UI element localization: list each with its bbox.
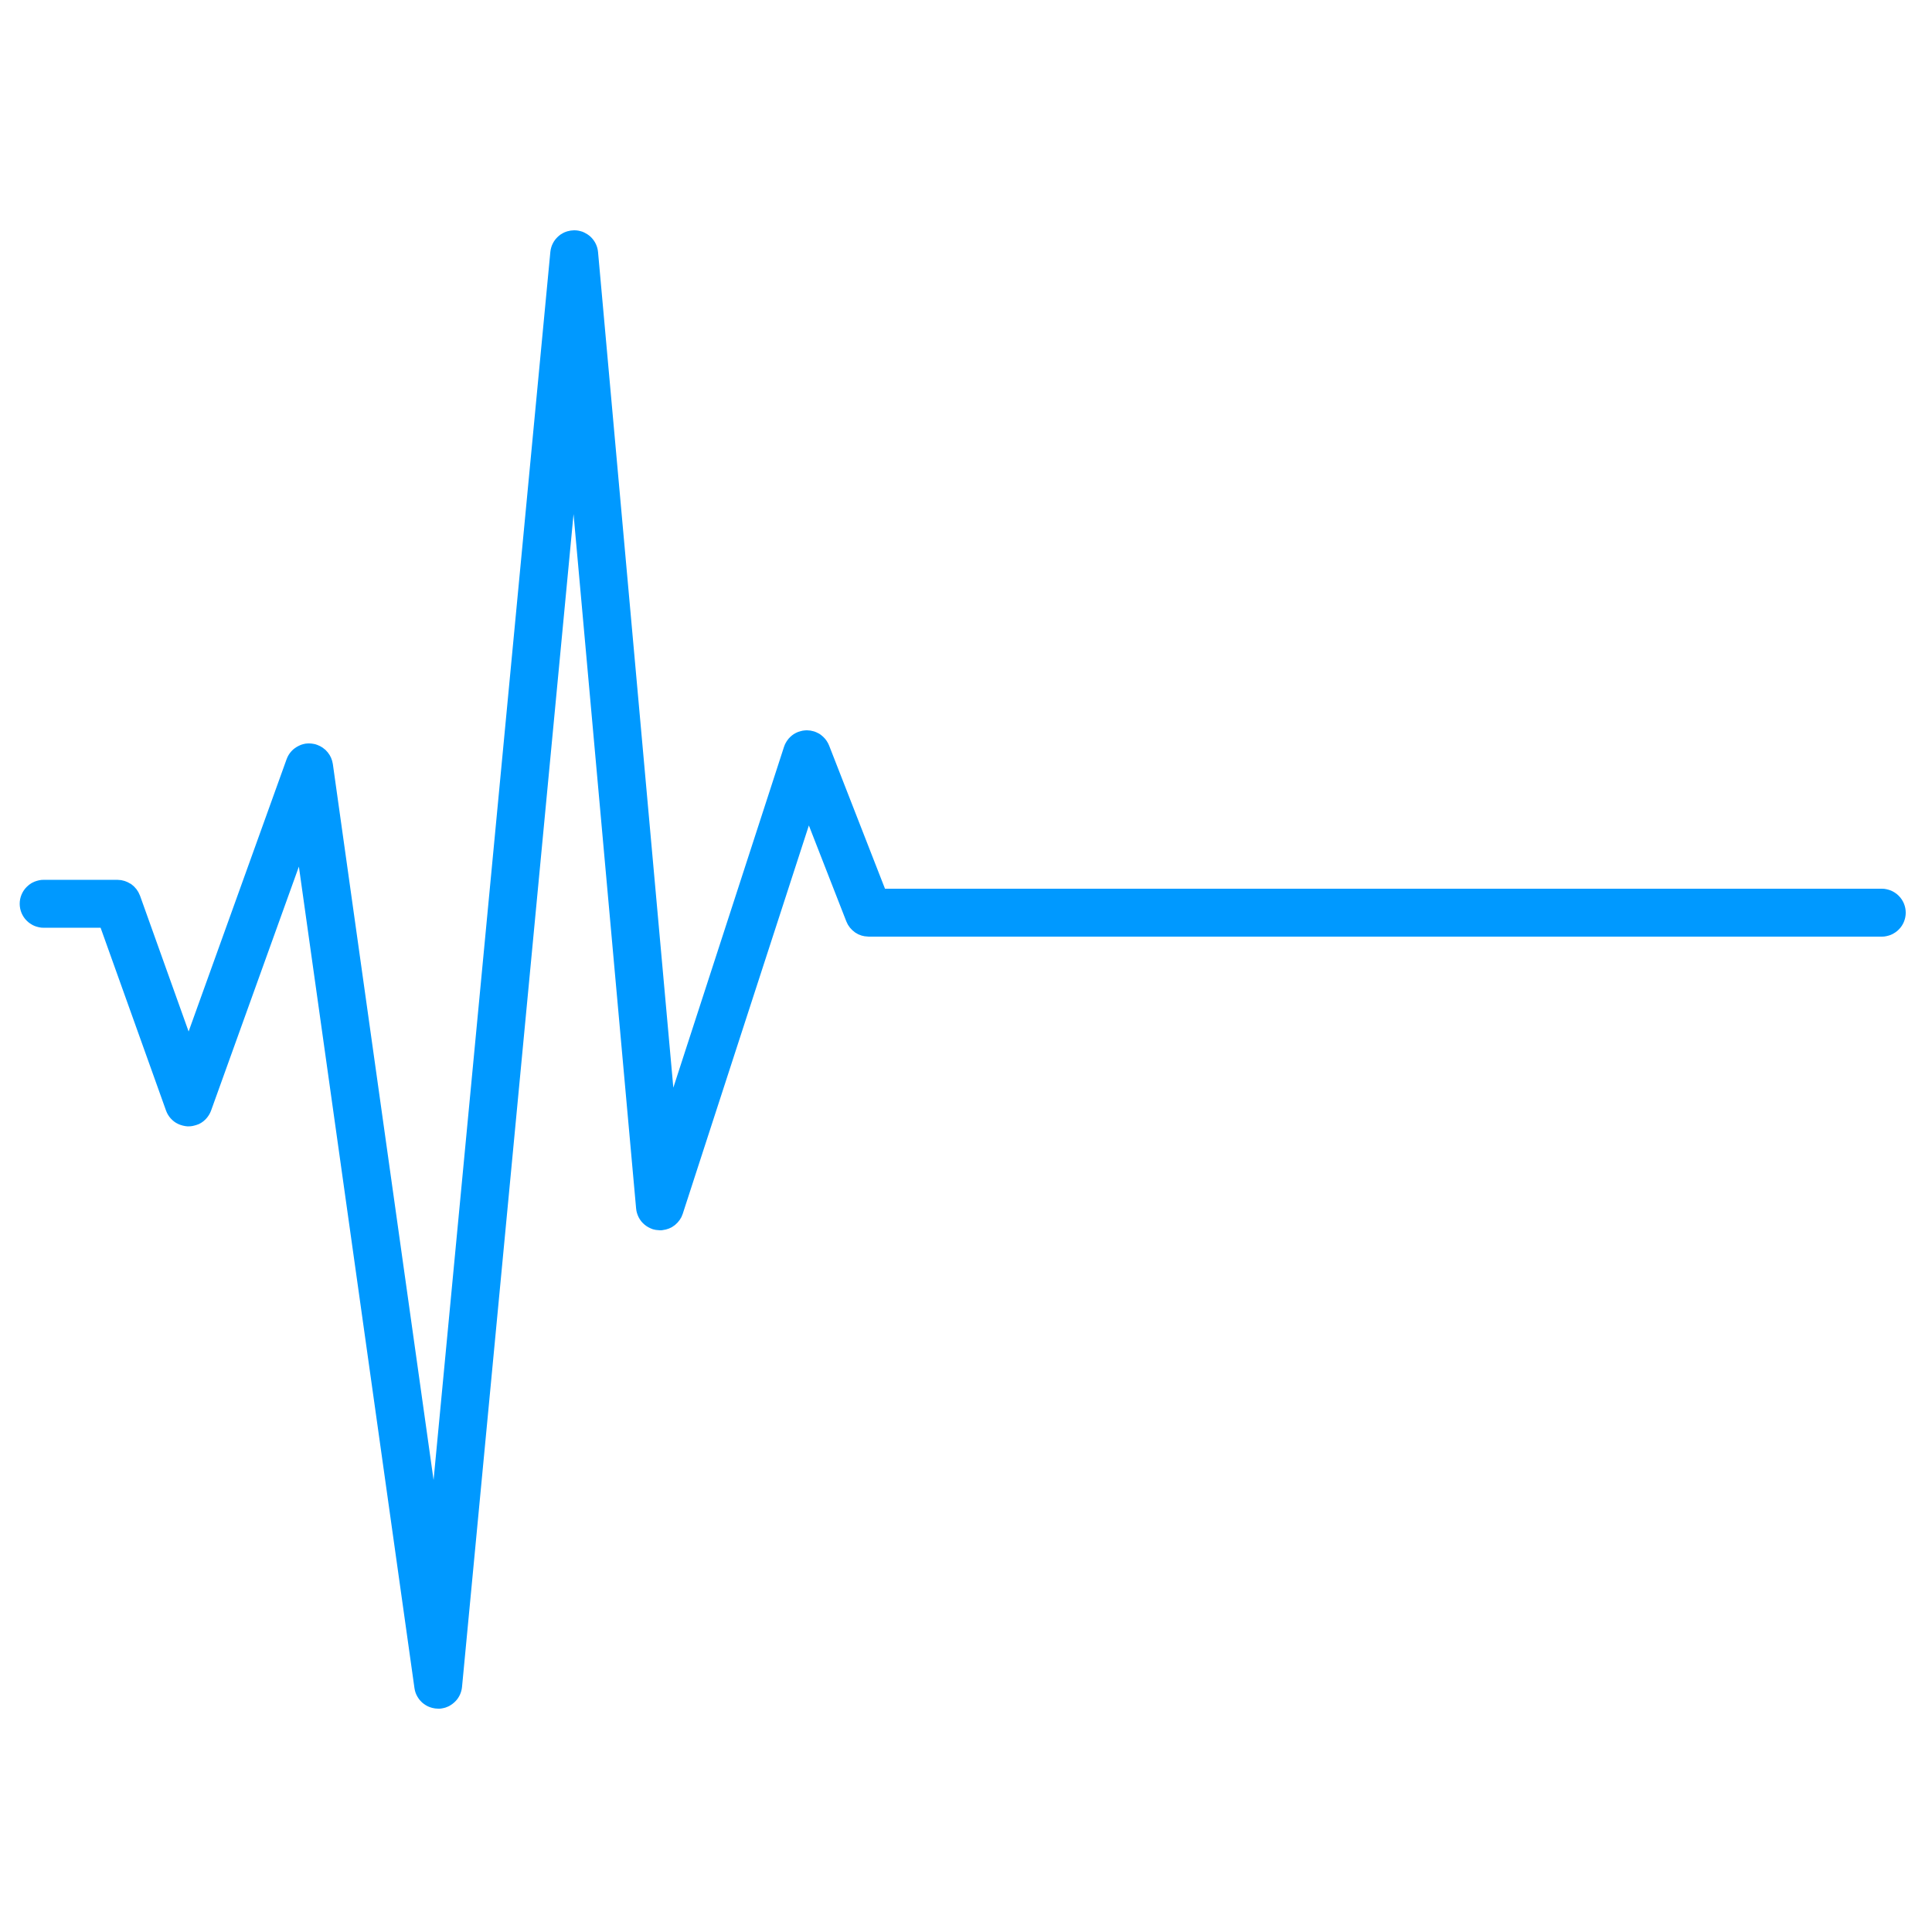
icon: heartbeat pulse line <box>43 254 1882 1685</box>
